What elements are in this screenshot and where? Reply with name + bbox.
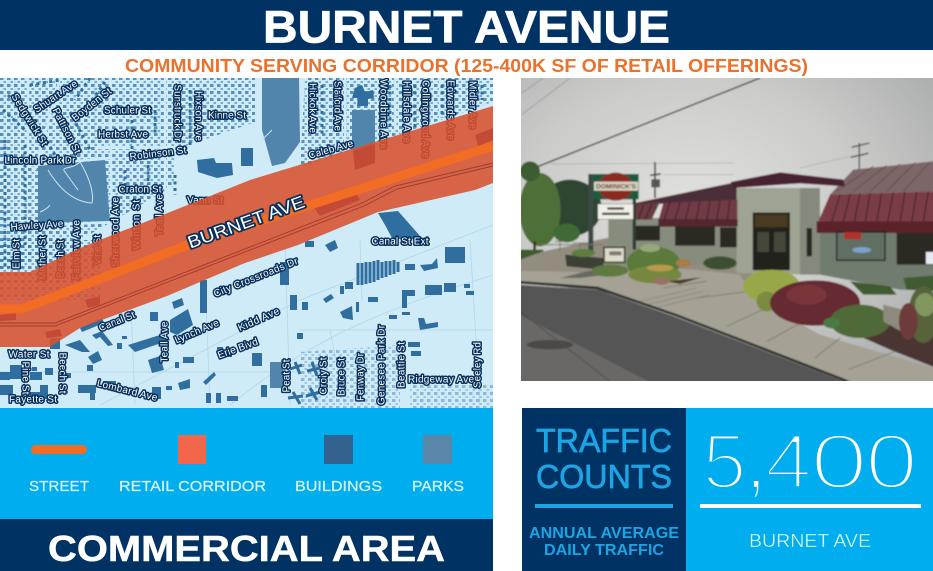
building roofs (635, 182, 737, 205)
street labels: Canal St Ext (372, 236, 429, 248)
photo: restaurant street view (521, 78, 933, 381)
street labels: Teall Ave (160, 321, 170, 362)
commercial area banner (0, 519, 493, 571)
traffic heading: COUNTS (536, 458, 672, 495)
legend: buildings (295, 435, 382, 495)
labels under corridor: Hillsdale Ave (400, 81, 412, 143)
labels under corridor (12, 79, 478, 280)
park paths (40, 130, 272, 212)
labels under corridor: Midler Ave (466, 81, 478, 129)
traffic heading (536, 422, 672, 495)
utility wires (522, 78, 850, 175)
street labels: Caleb Ave (307, 138, 355, 162)
landscaping (565, 244, 933, 372)
residential blocks (3, 78, 482, 270)
street labels: Hixson Ave (192, 91, 204, 141)
window reflection (837, 232, 885, 260)
labels under corridor: Elm St (12, 239, 22, 269)
legend: street (29, 445, 89, 495)
commercial area banner: COMMERCIAL AREA (48, 528, 445, 569)
traffic counts panel (522, 408, 686, 571)
traffic caption: DAILY TRAFFIC (544, 542, 664, 559)
street labels: Stafford Ave (332, 81, 342, 131)
street labels: Lynch Ave (173, 318, 221, 346)
sky (521, 78, 933, 373)
legend: parks: PARKS (412, 478, 464, 495)
traffic heading: TRAFFIC (536, 422, 672, 459)
street labels: Croly St (318, 357, 330, 394)
labels under corridor: Vine St (92, 235, 104, 265)
traffic count number: 0 (810, 417, 868, 505)
labels under corridor: Beech St (56, 240, 66, 278)
street (0, 146, 493, 309)
windows (635, 226, 933, 265)
legend: parks (412, 435, 464, 495)
street labels: Robinson St (129, 145, 187, 163)
entrance door (753, 213, 789, 270)
street labels: Hawley Ave (10, 219, 64, 233)
corridor buildings (0, 128, 493, 338)
street labels: Beech St (56, 352, 68, 394)
street labels: Shuart Ave (32, 78, 80, 116)
labels under corridor: Fairview Ave (72, 220, 82, 280)
street labels: Pine St (20, 362, 30, 395)
street labels: Canal St (97, 310, 137, 334)
residential texture (0, 78, 493, 408)
labels under corridor: Winton St (132, 200, 142, 250)
street labels: Fenway Dr (356, 352, 366, 401)
traffic value panel (686, 408, 933, 571)
curb (521, 280, 850, 381)
street labels: Genesee Park Dr (376, 324, 388, 405)
street label: Burnet Ave: BURNET AVE (185, 192, 307, 252)
labels under corridor: Collingwood Ave (420, 80, 430, 158)
traffic count number (702, 417, 918, 505)
traffic count number: , (746, 417, 766, 505)
header band (0, 0, 933, 52)
legend: retail corridor: RETAIL CORRIDOR (119, 478, 266, 495)
labels under corridor: Teall Ave (154, 194, 166, 236)
labels under corridor: Mather St (38, 236, 48, 280)
map panel (0, 78, 493, 408)
legend: street: STREET (29, 478, 89, 495)
tables in background (540, 241, 603, 251)
labels under corridor: Vann St (187, 196, 223, 206)
street labels: Lincoln Park Dr (4, 156, 76, 166)
roof seams (638, 191, 928, 222)
building walls (608, 218, 738, 265)
sign (588, 173, 639, 262)
street labels: Herbst Ave (98, 130, 148, 140)
sign: DOMINICK'S (596, 183, 636, 190)
street grid (0, 78, 493, 405)
parks (38, 78, 375, 388)
buildings (0, 85, 474, 403)
street labels: Sunstruck Dr (172, 84, 182, 142)
parallel building stripes (288, 260, 398, 404)
street labels: Beattie St (396, 342, 408, 388)
legend panel (0, 408, 493, 519)
street labels: Kidd Ave (237, 306, 282, 334)
traffic count number: 0 (865, 417, 918, 505)
labels under corridor: Woodbine Ave (378, 79, 388, 149)
street labels: Sedgwick St (9, 92, 49, 148)
labels under corridor: Edwards Ave (444, 80, 456, 140)
road (521, 284, 846, 381)
street labels: Kinne St (208, 110, 246, 122)
trees (519, 161, 602, 263)
street labels: Erie Blvd (216, 337, 260, 361)
traffic count number: 5 (702, 417, 746, 505)
street labels: Craton St (118, 184, 162, 196)
retail corridor (0, 106, 493, 347)
legend: buildings: BUILDINGS (295, 478, 382, 495)
legend: retail corridor (119, 435, 266, 495)
street labels: Boyden St (70, 86, 114, 124)
street labels: Ridgeway Ave (408, 374, 474, 386)
local roads over texture (0, 78, 440, 230)
traffic caption: ANNUAL AVERAGE (529, 525, 679, 542)
street labels: City Crossroads Dr (212, 256, 300, 300)
street labels: Water St (8, 350, 50, 360)
street labels: Fayette St (9, 394, 57, 406)
traffic count number: 4 (765, 417, 812, 505)
street labels: Schuler St (104, 106, 151, 116)
street labels: Bruce St (336, 358, 348, 396)
title: BURNET AVENUE (263, 2, 670, 52)
street labels: Hickok Ave (306, 83, 318, 133)
railway lines (0, 163, 493, 326)
utility poles (650, 143, 869, 198)
subtitle: COMMUNITY SERVING CORRIDOR (125-400K SF OF RETAIL OFFERINGS) (125, 55, 808, 76)
sidewalk joints (640, 281, 895, 370)
traffic caption (529, 525, 679, 559)
sidewalk (521, 268, 933, 381)
street labels: Peat St (282, 359, 292, 392)
street name: BURNET AVE (749, 531, 871, 551)
street labels: Seeley Rd (472, 342, 484, 388)
street labels (4, 78, 484, 406)
labels under corridor: Sherwood Ave (110, 197, 122, 267)
street labels: Lombard Ave (96, 378, 159, 404)
street labels: Pattison St (50, 106, 82, 156)
ground behind plants (520, 238, 753, 295)
